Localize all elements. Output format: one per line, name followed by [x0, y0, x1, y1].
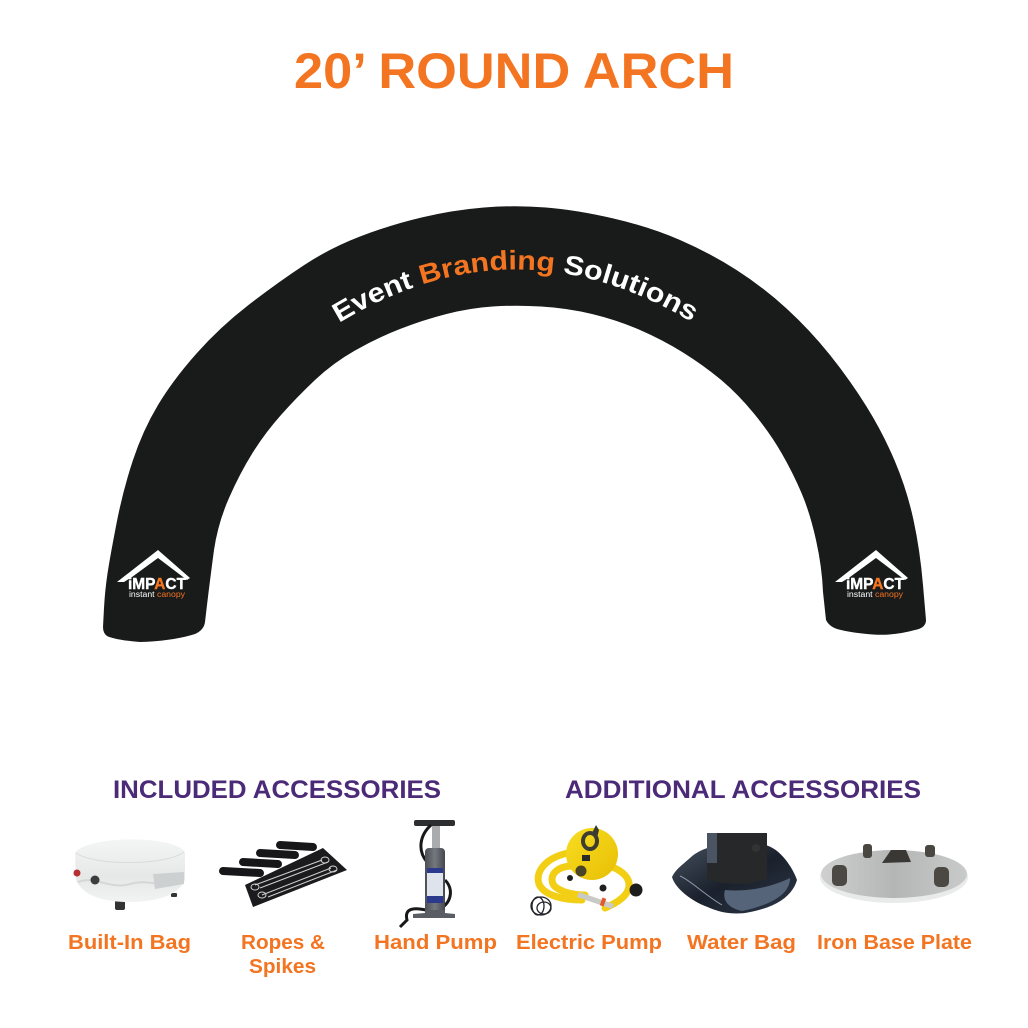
label: water bag: Water Bag: [687, 932, 796, 954]
label: ropes and spikes: Ropes &: [241, 932, 325, 954]
label: ropes and spikes: [241, 932, 325, 978]
inflatable arch: [103, 206, 926, 642]
right logo: iMPACT: [846, 576, 904, 593]
heading: included accessories: INCLUDED ACCESSORIES: [113, 776, 441, 804]
icon: built-in bag: [74, 839, 185, 910]
label: electric pump: Electric Pump: [516, 932, 662, 954]
label: iron base plate: Iron Base Plate: [817, 932, 972, 954]
icon: ropes and spikes: [223, 845, 347, 907]
left logo: instant canopy: [129, 590, 185, 599]
right logo: [835, 550, 908, 599]
icon: electric pump: [531, 825, 642, 915]
left logo: iMPACT: [128, 576, 186, 593]
label: hand pump: Hand Pump: [374, 932, 497, 954]
label: ropes and spikes: Spikes: [249, 956, 316, 978]
heading: additional accessories: ADDITIONAL ACCESSORIES: [565, 776, 921, 804]
label: built-in bag: Built-In Bag: [68, 932, 191, 954]
title: 20’ ROUND ARCH: [294, 43, 734, 99]
icon: water bag: [672, 833, 797, 913]
arch text: Event Branding Solutions: [332, 250, 696, 322]
left logo: [117, 550, 190, 599]
icon: iron base plate: [820, 844, 968, 903]
right logo: instant canopy: [847, 590, 903, 599]
icon: hand pump: [400, 820, 455, 927]
